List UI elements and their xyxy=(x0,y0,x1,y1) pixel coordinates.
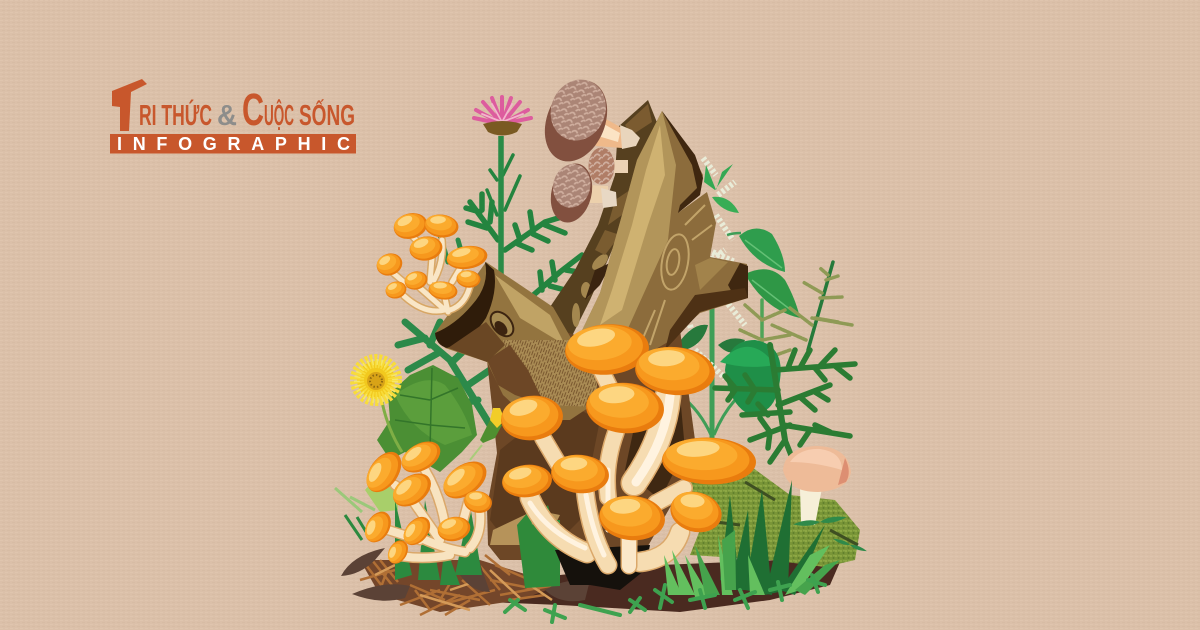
lower left grass xyxy=(395,500,482,585)
ground sprouts xyxy=(505,575,825,622)
cluster stems xyxy=(392,236,470,312)
moss mound xyxy=(683,462,860,567)
left fern behind stump xyxy=(398,235,490,425)
nettle stem and flowers xyxy=(673,158,745,440)
thistle stem xyxy=(498,136,504,276)
needle litter and dead leaves xyxy=(341,545,590,615)
lower cluster stems xyxy=(388,470,480,558)
upper left orange mushroom cluster xyxy=(374,209,489,312)
logo wordmark xyxy=(139,84,355,135)
cluster caps xyxy=(374,209,489,301)
small rear brown mushroom xyxy=(588,148,628,184)
thistle flower xyxy=(474,97,531,136)
logo: Tri Thức & Cuộc Sống Infographic xyxy=(110,79,356,154)
coltsfoot flowers and leaves xyxy=(357,361,505,512)
pink mushroom xyxy=(783,446,851,525)
ground xyxy=(335,462,860,615)
stump main spire xyxy=(575,111,748,358)
stump left branch xyxy=(435,262,600,420)
brown mushrooms on stump xyxy=(533,71,640,227)
logo infographic banner: INFOGRAPHIC xyxy=(117,134,350,154)
logo mark: T xyxy=(112,79,147,131)
light blades xyxy=(664,530,840,597)
right background plants xyxy=(673,158,855,465)
logo wordmark: & xyxy=(217,100,237,132)
soil xyxy=(375,560,840,612)
main cluster caps xyxy=(499,321,757,543)
dark leaves behind fern xyxy=(725,340,781,413)
feathery fern xyxy=(715,345,855,465)
coltsfoot flower xyxy=(357,361,395,400)
lower left orange mushroom cluster xyxy=(360,435,494,567)
big green leaf xyxy=(377,365,477,472)
pale green leaf xyxy=(365,484,398,512)
logo wordmark: RI THỨC xyxy=(139,98,212,132)
dark roots under mushrooms xyxy=(555,545,650,590)
logo wordmark: SỐNG xyxy=(299,98,355,132)
clover sprigs xyxy=(793,515,868,553)
logo wordmark: C xyxy=(242,84,264,135)
branch cut end xyxy=(435,262,495,348)
main orange mushroom cluster xyxy=(499,321,757,566)
logo wordmark: UỘC xyxy=(264,98,294,132)
foreground grass and clovers xyxy=(505,480,868,622)
lower cluster caps xyxy=(360,435,494,567)
yellow flower bud xyxy=(470,408,505,460)
knot on branch xyxy=(486,307,518,341)
stump lower mass xyxy=(447,310,695,560)
main cluster stems xyxy=(530,368,684,566)
dark blades xyxy=(720,480,825,595)
large brown mushroom xyxy=(533,71,640,171)
tree stump xyxy=(435,100,748,560)
center grass patch xyxy=(517,505,560,588)
thistle plant xyxy=(466,97,582,298)
lower brown mushroom xyxy=(545,159,617,227)
thistle leaves xyxy=(466,155,582,298)
stump dark back bark xyxy=(548,100,658,350)
coltsfoot stem xyxy=(382,402,402,452)
mugwort sprigs xyxy=(735,262,852,390)
nettle leaves xyxy=(727,228,800,318)
